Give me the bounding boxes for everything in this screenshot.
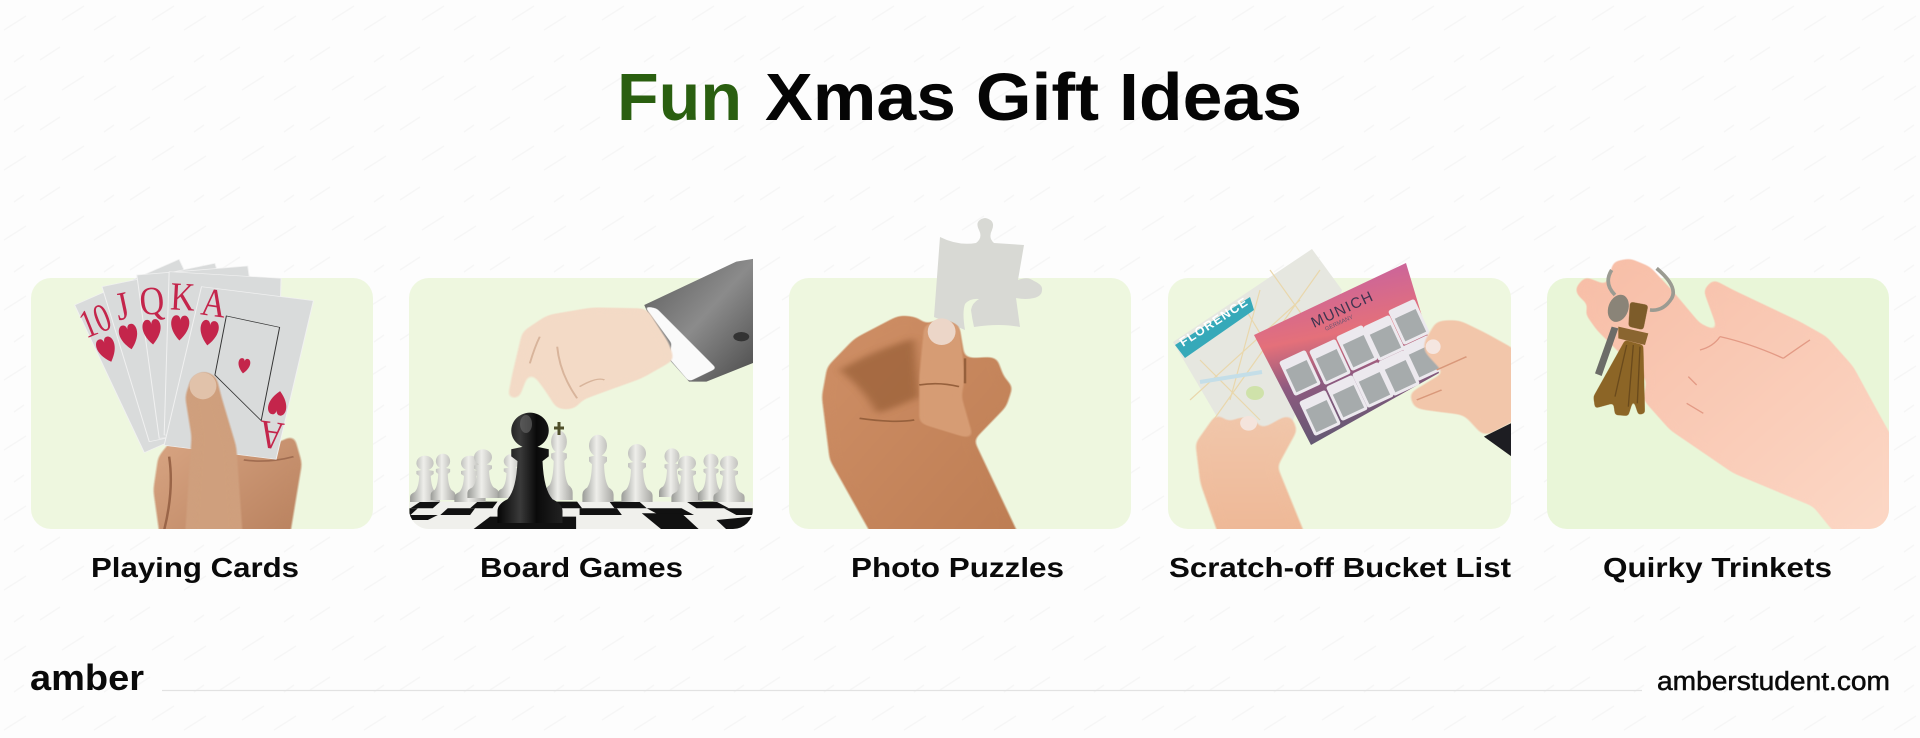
- munich scratch card: MUNICH: [1309, 288, 1376, 332]
- sleeve and hand: [507, 258, 756, 409]
- icon: hand holding puzzle: [822, 315, 1021, 540]
- chess board: [409, 502, 753, 532]
- footer website: amberstudent.com: [1657, 668, 1890, 696]
- footer logo: amber: amber: [30, 657, 144, 698]
- label: quirky trinkets: Quirky Trinkets: [1603, 552, 1832, 583]
- icon: hand holding playing cards: [73, 259, 313, 550]
- label: board games: Board Games: [480, 552, 683, 583]
- icon: hand holding playing cards: J: [111, 284, 133, 330]
- icon: chess pieces and reaching hand: [409, 258, 756, 532]
- icon: scratch-off cards and hands: [1173, 249, 1516, 540]
- label: playing cards: Playing Cards: [91, 552, 299, 583]
- icon: hand holding playing cards: 10: [73, 294, 117, 347]
- panel: playing cards: [31, 259, 373, 550]
- icon: hand holding playing cards: K: [169, 275, 196, 320]
- panel: board games: [409, 258, 756, 532]
- icon: hand holding playing cards: A: [198, 280, 229, 327]
- florence map card: [1173, 249, 1342, 435]
- title: Xmas Gift Ideas: [765, 60, 1302, 135]
- label: scratch-off bucket list: Scratch-off Bucket List: [1169, 552, 1511, 583]
- panel: quirky trinkets: [1547, 258, 1892, 540]
- icon: hand holding playing cards: Q: [138, 279, 166, 325]
- panel: scratch-off bucket list: [1168, 249, 1516, 540]
- munich scratch card: [1254, 263, 1444, 445]
- label: photo puzzles: Photo Puzzles: [851, 552, 1064, 583]
- munich scratch card: GERMANY: [1324, 315, 1354, 333]
- icon: hand holding key ring: [1575, 258, 1892, 540]
- icon: jigsaw puzzle piece: [934, 218, 1042, 330]
- florence map card: FLORENCE: [1177, 295, 1250, 350]
- title: Fun: [617, 60, 742, 135]
- icon: hand holding playing cards: A: [256, 411, 287, 458]
- panel: photo puzzles: [789, 218, 1131, 540]
- hands: [1195, 320, 1516, 540]
